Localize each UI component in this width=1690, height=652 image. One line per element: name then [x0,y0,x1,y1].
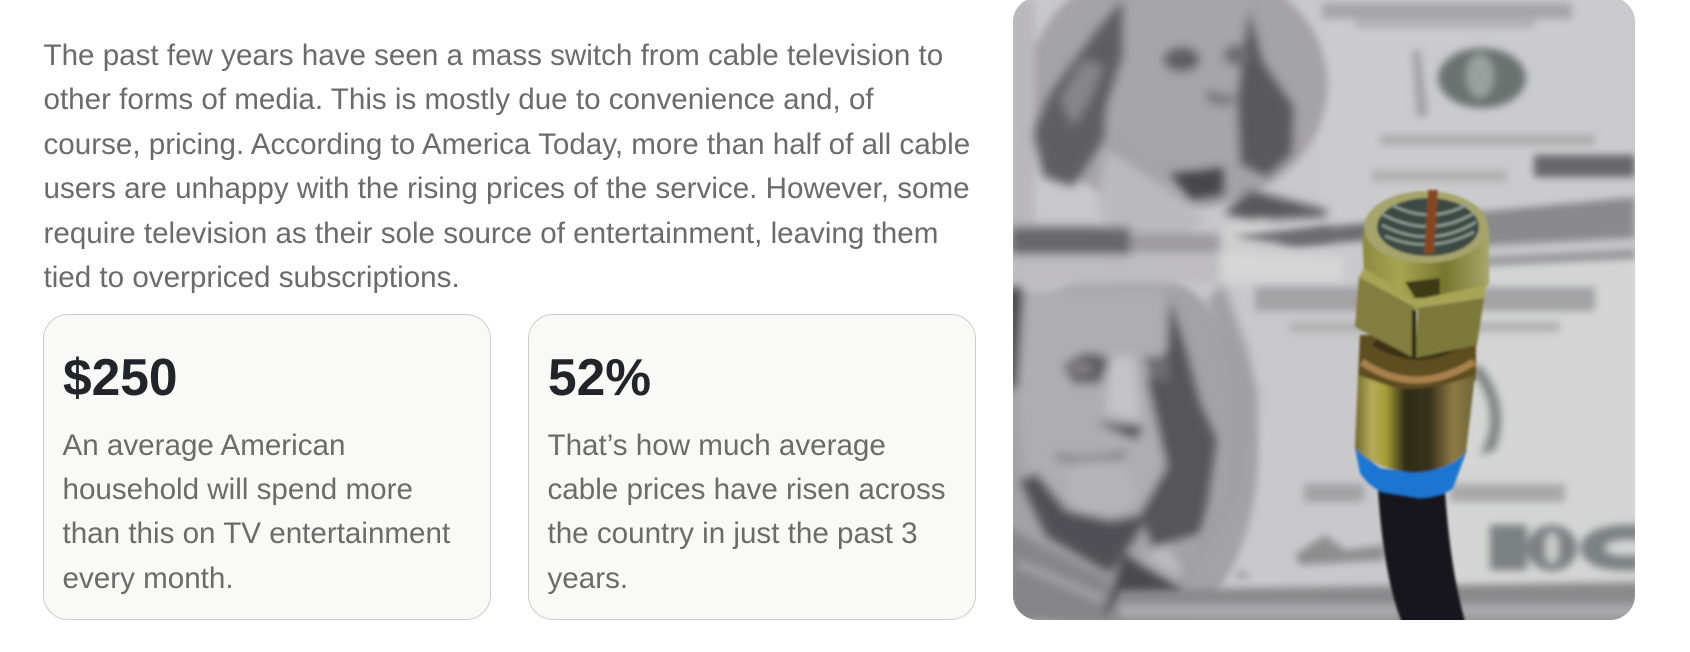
intro paragraph: other forms of media. This is mostly due to convenience and, of [44,83,874,116]
lower portrait [1007,283,1258,623]
threaded barrel [1362,228,1489,310]
stat description: household spend [62,428,450,595]
stat description: price rise: That’s how much average [548,428,886,462]
intro paragraph: require television as their sole source of entertainment, leaving them [44,217,938,250]
top portrait [1010,0,1343,287]
intro paragraph: tied to overpriced subscriptions. [44,261,460,294]
intro paragraph: The past few years have seen a mass switch from cable television to [44,39,943,72]
stat number: 52%: 52% [548,348,651,406]
icon: coaxial connector and cable [1355,190,1489,625]
stat description: household spend: every month. [62,562,234,595]
stat description: household spend: household will spend more [62,473,413,506]
stat description: price rise: cable prices have risen across [548,473,946,506]
photo: coaxial cable connector in front of blurred hundred dollar bills [1013,0,1635,620]
panel: 52% stat card [528,314,976,620]
hex nut [1355,277,1414,357]
stat description: household spend: An average American [62,428,345,462]
panel: $250 stat card [43,314,491,620]
bill printing [1100,3,1640,625]
stat description: price rise: the country in just the past 3 [548,517,918,550]
intro paragraph: users are unhappy with the rising prices of the service. However, some [44,172,970,205]
stat number: $250: $250 [63,348,178,406]
stat description: price rise: years. [548,562,628,595]
intro paragraph: course, pricing. According to America Today, more than half of all cable [44,128,970,161]
stat description: price rise [548,428,946,595]
stat description: household spend: than this on TV entertainment [62,517,450,550]
cable [1378,490,1466,625]
intro paragraph [44,39,970,294]
blue crimp band [1355,448,1467,498]
crimp sleeve [1355,375,1475,473]
collar ring [1358,335,1476,390]
